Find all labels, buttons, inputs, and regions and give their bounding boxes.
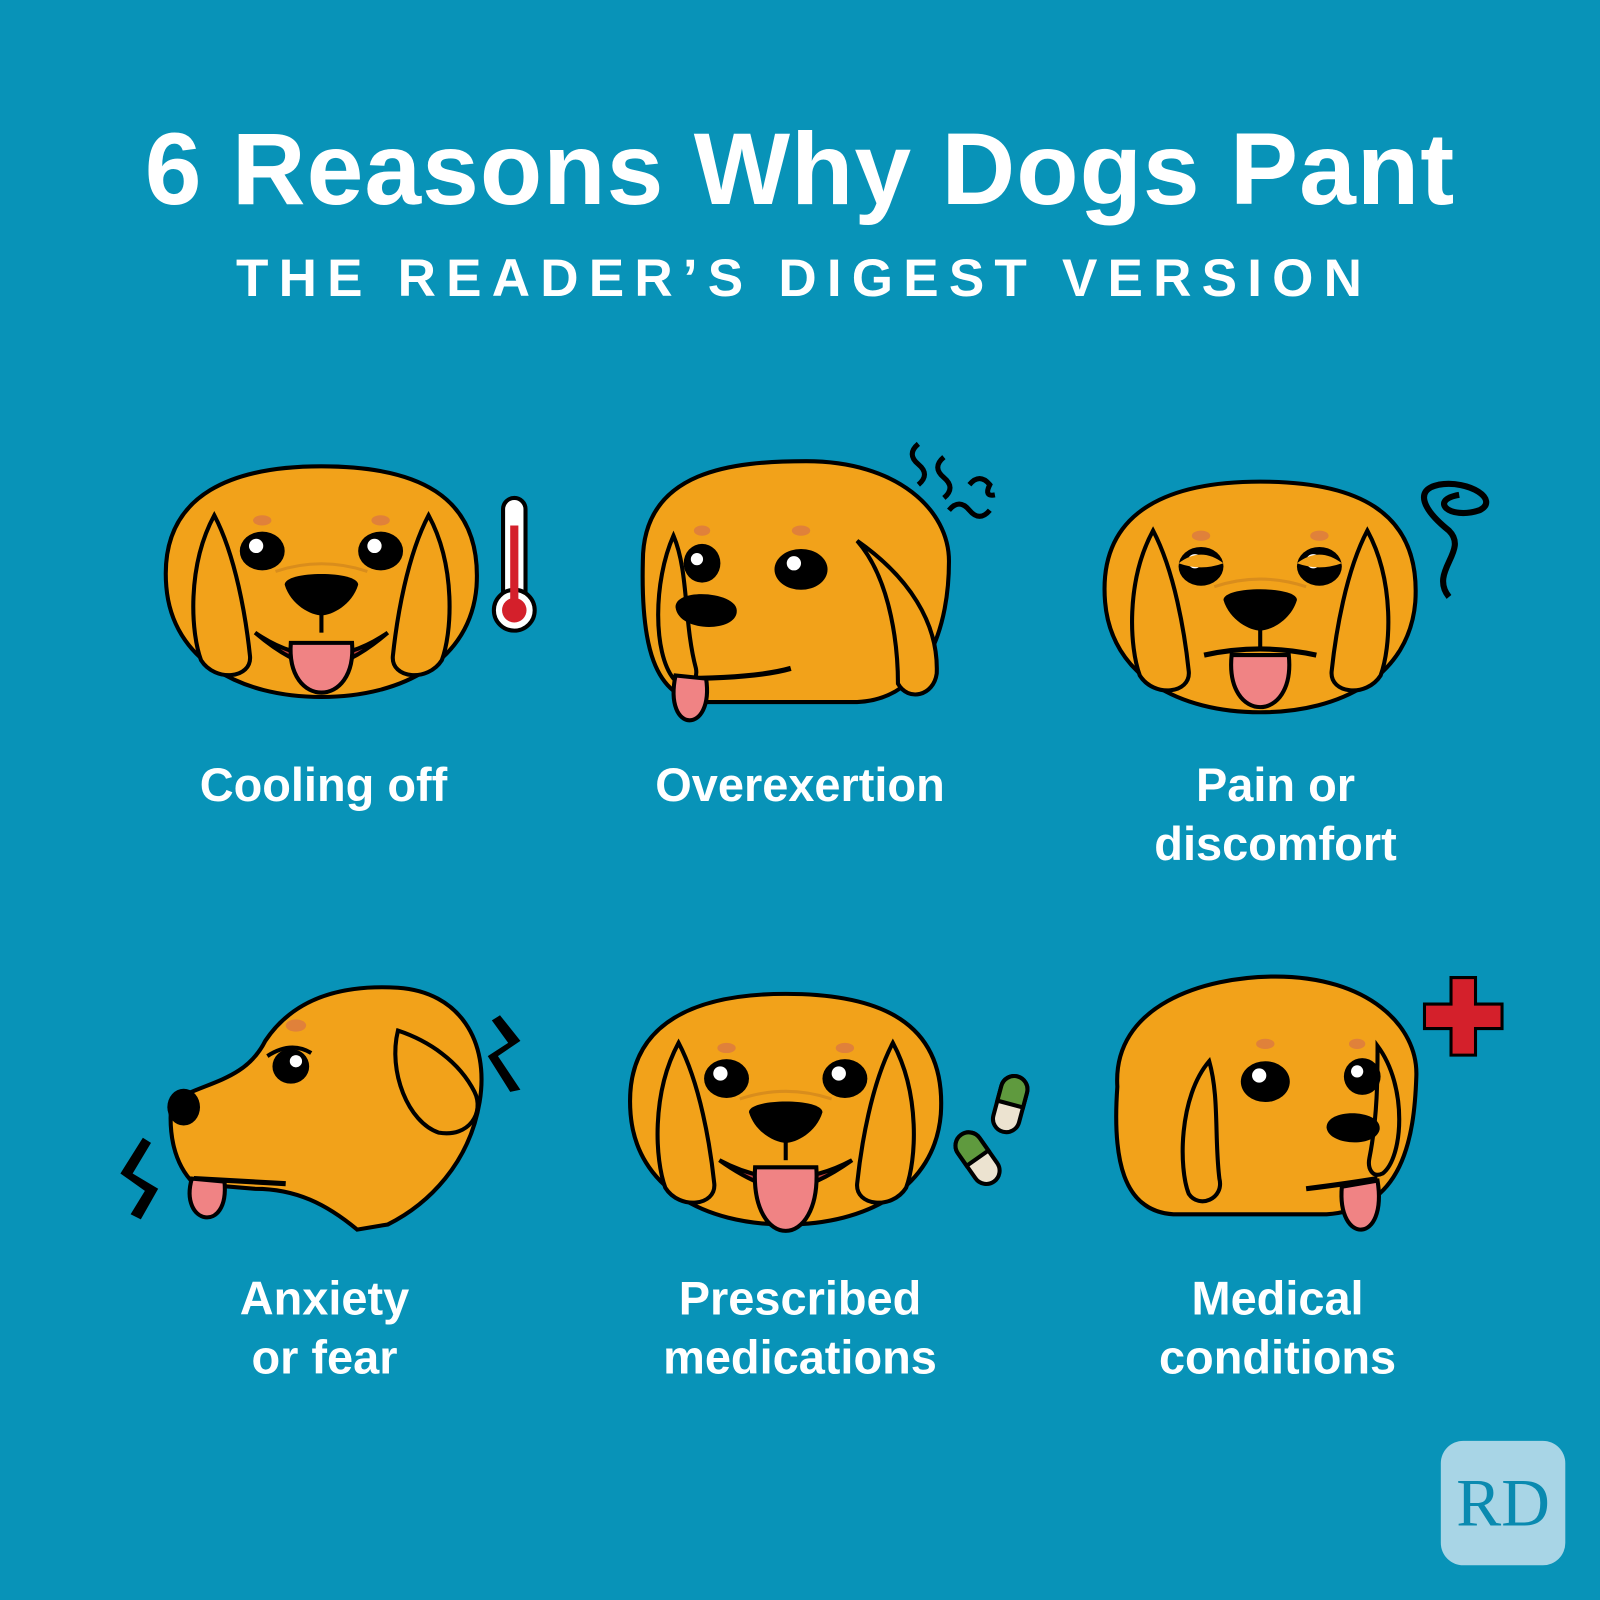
panel: overexertion xyxy=(643,444,995,811)
label: Medical xyxy=(1191,1272,1364,1324)
dog: pain xyxy=(1105,482,1416,712)
panel: pain or discomfort: discomfort xyxy=(1154,818,1397,870)
dog: medical xyxy=(1116,977,1416,1230)
icon: scribble xyxy=(1424,484,1486,597)
panel: prescribed medications: medications xyxy=(663,1331,937,1383)
label: Pain or xyxy=(1196,759,1355,811)
panel: cooling off xyxy=(166,466,535,811)
icon: pills xyxy=(950,1073,1030,1189)
dog: medications xyxy=(630,994,941,1231)
icon: sweat squiggles xyxy=(912,444,995,516)
icon: red cross xyxy=(1424,978,1502,1055)
panel: medical conditions: conditions xyxy=(1159,1331,1396,1383)
subtitle: THE READER’S DIGEST VERSION xyxy=(236,249,1372,308)
dog: anxiety side xyxy=(167,987,482,1230)
panel: medical conditions xyxy=(1116,977,1502,1383)
title: 6 Reasons Why Dogs Pant xyxy=(145,112,1455,226)
icon: zigzags xyxy=(120,1015,520,1219)
dog: overexertion xyxy=(643,461,949,720)
panel: pain or discomfort xyxy=(1105,482,1486,870)
logo: RD: RD xyxy=(1456,1466,1550,1541)
dog: cooling off xyxy=(166,466,477,697)
panel: prescribed medications xyxy=(630,994,1030,1383)
panel: anxiety xyxy=(120,987,520,1383)
panel: anxiety: or fear xyxy=(251,1331,398,1383)
label: Overexertion xyxy=(655,759,945,811)
logo: RD xyxy=(1441,1441,1565,1565)
label: Cooling off xyxy=(200,759,448,811)
icon: thermometer xyxy=(494,498,535,631)
label: Anxiety xyxy=(240,1272,409,1324)
label: Prescribed xyxy=(679,1272,921,1324)
